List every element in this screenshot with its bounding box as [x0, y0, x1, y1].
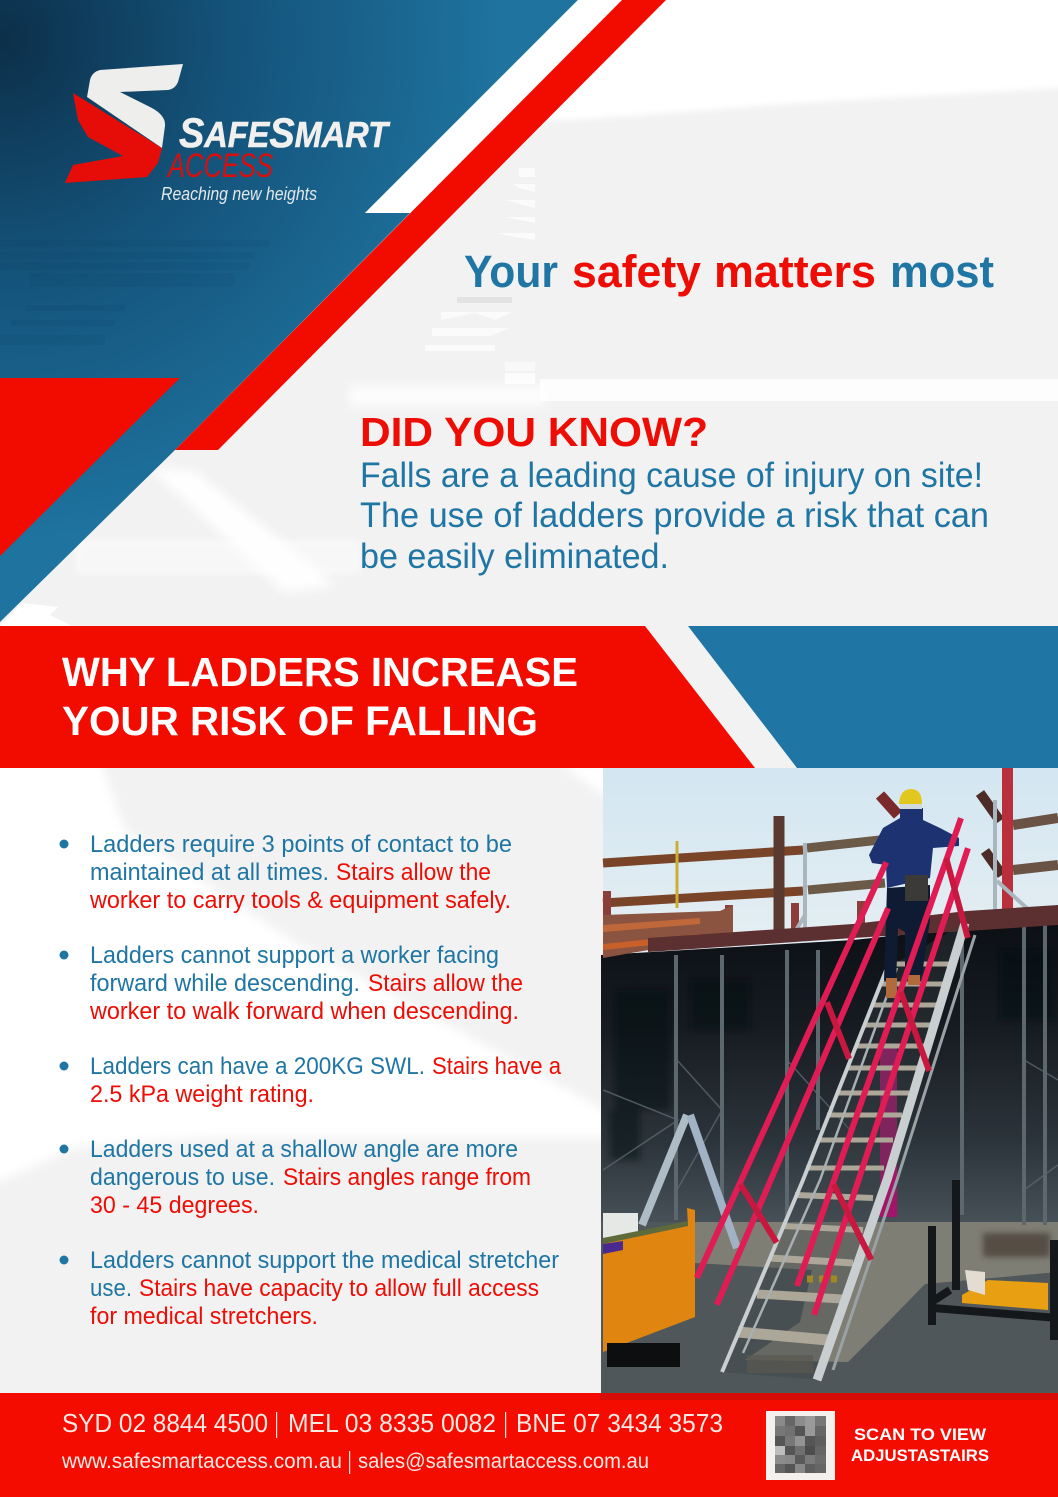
text block: falls intro: The use of ladders provide a risk that can [360, 496, 989, 535]
bullet 3: Stairs have a [432, 1053, 562, 1080]
ghost logo texture [0, 240, 270, 345]
contact phones [62, 1408, 723, 1438]
panel: bullet list [60, 831, 562, 1330]
bullet 1 [60, 831, 512, 914]
concrete patch [695, 1222, 1058, 1362]
bullet 1: worker to carry tools & equipment safely. [89, 887, 511, 914]
trolley [932, 1180, 1058, 1340]
red post [1002, 768, 1013, 912]
bullet 4: Ladders used at a shallow angle are more [90, 1136, 518, 1163]
scaffold props [603, 915, 1058, 1225]
white stripe [365, 0, 622, 213]
icon: hard hat [899, 789, 922, 804]
heading: your safety matters most: safety [572, 246, 701, 297]
wall [601, 922, 1058, 1235]
bullet 4: 30 - 45 degrees. [90, 1192, 259, 1219]
contact web [61, 1450, 649, 1474]
silver posts [795, 800, 1030, 932]
bullet 5 [60, 1247, 559, 1330]
banner heading: YOUR RISK OF FALLING [62, 698, 538, 744]
logo tagline: Reaching new heights [161, 184, 317, 204]
bullet 4: dangerous to use. [90, 1164, 275, 1191]
worker [869, 789, 959, 998]
banner heading [62, 649, 578, 744]
panel: why ladders banner [0, 626, 1058, 768]
panel: blue diagonal banner [0, 0, 666, 622]
bullet 3: Ladders can have a 200KG SWL. [90, 1053, 425, 1080]
logo: SafeSmart Access [65, 64, 391, 204]
sky [603, 768, 1058, 958]
scan label: SCAN TO VIEW [854, 1425, 987, 1444]
brick stack [603, 905, 733, 958]
scan label: ADJUSTASTAIRS [851, 1446, 989, 1465]
contact web: sales@safesmartaccess.com.au [358, 1450, 649, 1473]
bullet 1: Ladders require 3 points of contact to be [90, 831, 512, 858]
blue banner [688, 626, 1058, 768]
bullet 3 [60, 1053, 562, 1108]
text block: falls intro: Falls are a leading cause of injury on site! [360, 456, 983, 495]
bullet 1: maintained at all times. [90, 859, 329, 886]
heading: your safety matters most: most [890, 246, 994, 297]
heading: your safety matters most [464, 246, 994, 297]
white sweep behind list [0, 760, 620, 1190]
brown patch [747, 1355, 813, 1373]
bullet 5: Stairs have capacity to allow full access [139, 1275, 539, 1302]
bullet 2: Ladders cannot support a worker facing [90, 942, 499, 969]
heading: did you know: DID YOU KNOW? [360, 409, 708, 455]
heading: your safety matters most: Your [464, 246, 558, 297]
text block: falls intro: be easily eliminated. [360, 537, 669, 576]
stair [722, 923, 975, 1380]
slab edge [648, 905, 1058, 952]
red handrails [698, 821, 967, 1312]
logo wordmark: SAFESMART [179, 109, 391, 156]
heading: your safety matters most: matters [714, 246, 876, 297]
bullet 2: Stairs allow the [368, 970, 523, 997]
bullet 2: forward while descending. [90, 970, 360, 997]
red stripe [175, 0, 666, 450]
bullet 5: use. [90, 1275, 132, 1302]
ghost artefacts near tagline [425, 168, 535, 384]
bullet 3: 2.5 kPa weight rating. [90, 1081, 314, 1108]
contact phones: SYD 02 8844 4500 [62, 1408, 268, 1438]
bullet 4 [60, 1136, 531, 1219]
timber guard rails [603, 793, 1058, 935]
QR code [766, 1411, 835, 1480]
icon: S mark [65, 64, 183, 183]
wall foot shadow [983, 1233, 1050, 1257]
bullet 2: worker to walk forward when descending. [89, 998, 519, 1025]
red banner [0, 626, 755, 768]
red triangle [0, 378, 180, 556]
scan label [851, 1425, 989, 1465]
bullet 4: Stairs angles range from [283, 1164, 531, 1191]
yellow debris [807, 1276, 843, 1282]
wall dark blocks [610, 950, 1055, 1160]
stepladder [642, 1115, 737, 1248]
ground [601, 1222, 1058, 1393]
photo: worker climbing aluminium stairs [601, 768, 1058, 1393]
orange bin [603, 1208, 695, 1367]
panel: footer [0, 1393, 1058, 1497]
contact web: www.safesmartaccess.com.au [61, 1450, 342, 1473]
contact phones: MEL 03 8335 0082 [288, 1408, 496, 1438]
bullet 2 [60, 942, 523, 1025]
banner heading: WHY LADDERS INCREASE [62, 649, 578, 695]
bullet 5: for medical stretchers. [90, 1303, 318, 1330]
logo subword: ACCESS [166, 147, 273, 185]
text block: falls intro [360, 456, 989, 576]
bullet 1: Stairs allow the [336, 859, 491, 886]
magenta column [880, 1045, 897, 1217]
bullet 5: Ladders cannot support the medical stretcher [90, 1247, 559, 1274]
contact phones: BNE 07 3434 3573 [516, 1408, 723, 1438]
